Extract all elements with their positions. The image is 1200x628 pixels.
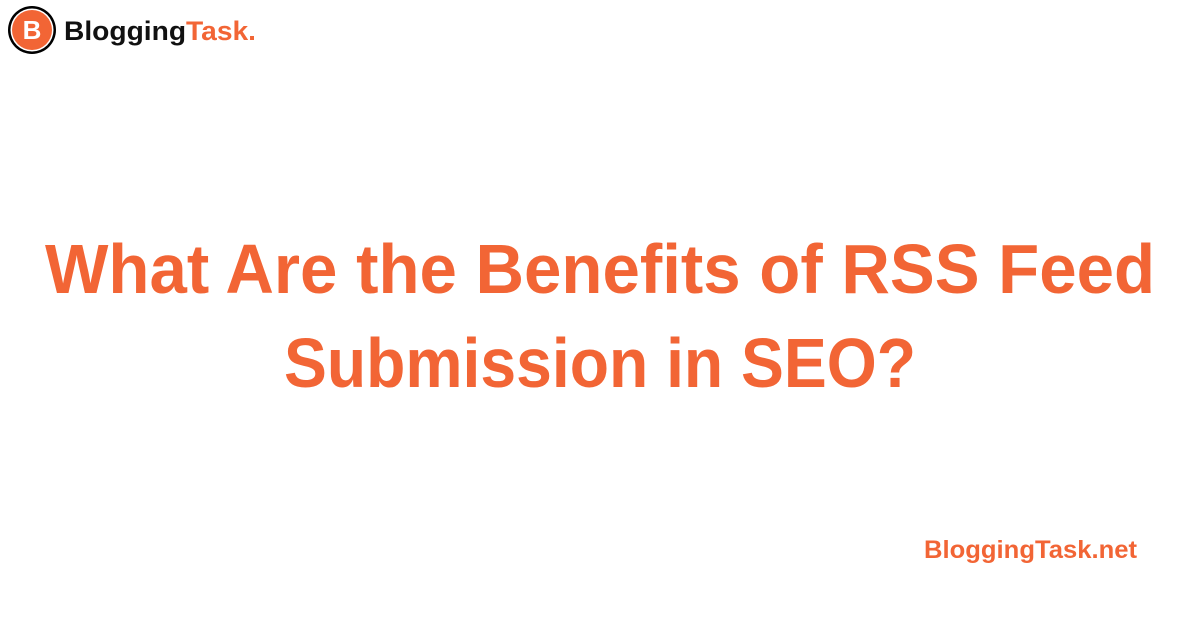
title: What Are the Benefits of RSS Feed	[45, 230, 1155, 308]
logo	[8, 6, 256, 54]
icon: logo circle	[8, 6, 56, 54]
logo wordmark: BloggingTask.	[64, 16, 256, 46]
icon: logo circle: B	[23, 15, 41, 45]
title: Submission in SEO?	[284, 324, 916, 402]
title	[45, 230, 1155, 402]
footer url: BloggingTask.net	[924, 536, 1138, 564]
